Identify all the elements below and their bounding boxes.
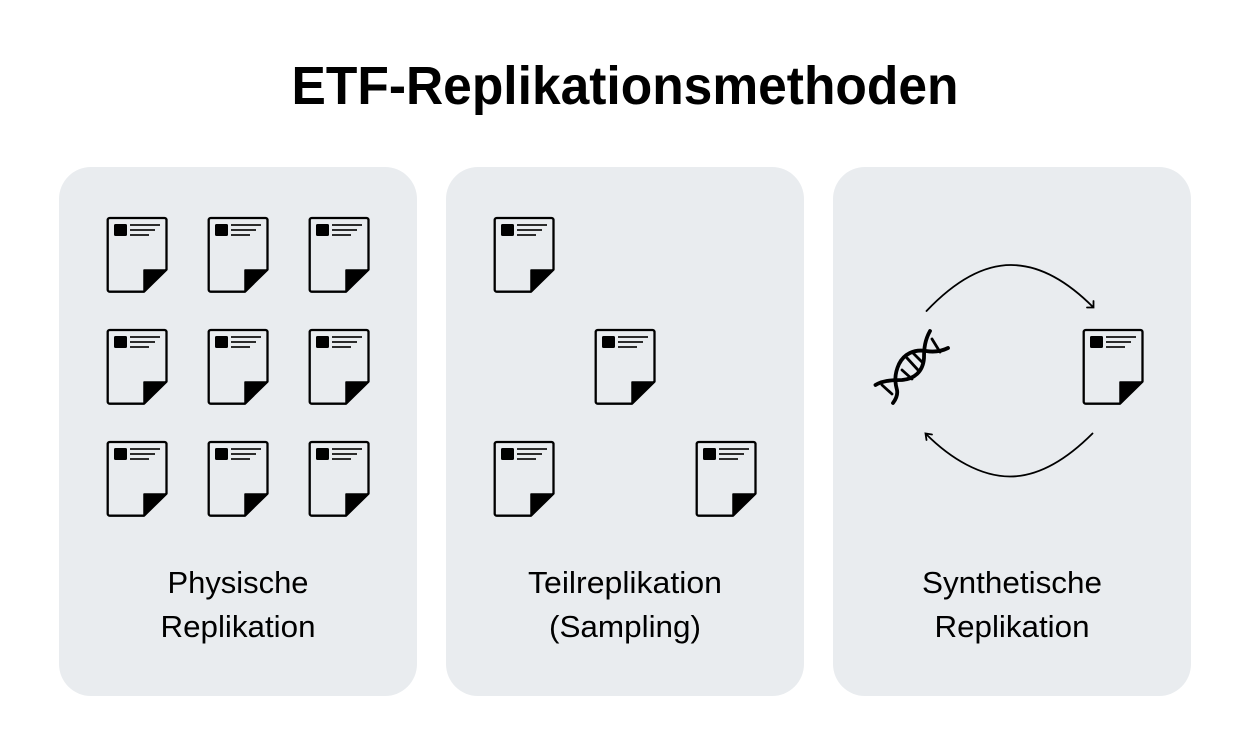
label: Physische Replikation: Physische (168, 565, 308, 600)
arrow: bottom curve to DNA (926, 434, 1092, 476)
icon: document (1084, 330, 1142, 404)
panel: Physische Replikation (59, 167, 417, 696)
label: Physische Replikation: Replikation (160, 609, 316, 644)
label: Teilreplikation (Sampling): Teilreplikation (528, 565, 722, 600)
label: Teilreplikation (Sampling) (528, 565, 722, 644)
icon: DNA helix (876, 331, 948, 403)
label: Synthetische Replikation: Synthetische (922, 565, 1102, 600)
icon grid: nine documents (108, 218, 368, 516)
label: Physische Replikation (160, 565, 316, 644)
title: ETF-Replikationsmethoden (292, 56, 958, 116)
panel: Synthetische Replikation (833, 167, 1191, 696)
panel: Teilreplikation (Sampling) (446, 167, 804, 696)
icon group: four sampled documents (495, 218, 756, 516)
label: Teilreplikation (Sampling): (Sampling) (549, 609, 701, 644)
label: Synthetische Replikation: Replikation (934, 609, 1090, 644)
label: Synthetische Replikation (922, 565, 1102, 644)
arrow: top curve to document (926, 265, 1094, 311)
